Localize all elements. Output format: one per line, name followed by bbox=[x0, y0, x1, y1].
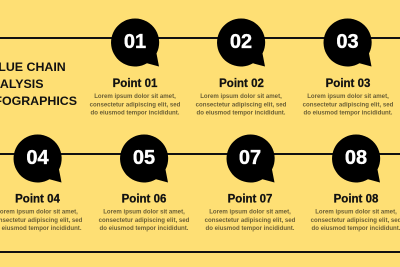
point 01 bbox=[90, 18, 181, 117]
heading 04: Point 04 bbox=[15, 194, 60, 206]
heading 07: Point 07 bbox=[228, 194, 272, 206]
number 07: 07 bbox=[239, 147, 261, 169]
point 03 bbox=[303, 18, 394, 116]
point 02 bbox=[196, 18, 287, 116]
text 02: Lorem ipsum dolor sit amet, bbox=[200, 93, 282, 100]
text 06: consectetur adipiscing elit, sed bbox=[99, 217, 190, 224]
icon: bubble 04 bbox=[14, 134, 62, 182]
text 08: do eiusmod tempor incididunt. bbox=[311, 225, 400, 232]
heading 03: Point 03 bbox=[326, 78, 370, 90]
icon: bubble 08 bbox=[332, 134, 380, 182]
text 01: Lorem ipsum dolor sit amet, bbox=[94, 93, 176, 100]
number 05: 05 bbox=[133, 147, 155, 169]
text 02 bbox=[196, 93, 287, 116]
point 07 bbox=[205, 134, 296, 232]
text 02: do eiusmod tempor incididunt. bbox=[196, 110, 286, 116]
text 08: consectetur adipiscing elit, sed bbox=[311, 217, 400, 224]
title bbox=[0, 60, 77, 108]
number 01: 01 bbox=[124, 31, 146, 53]
icon: bubble 03 bbox=[324, 18, 372, 66]
text 08: Lorem ipsum dolor sit amet, bbox=[315, 208, 397, 216]
number 03: 03 bbox=[336, 31, 359, 53]
number 08: 08 bbox=[345, 147, 367, 169]
heading 08: Point 08 bbox=[334, 194, 379, 206]
icon: bubble 01 bbox=[111, 18, 159, 67]
text 03: do eiusmod tempor incididunt. bbox=[303, 110, 393, 116]
text 08 bbox=[311, 208, 400, 232]
text 07: consectetur adipiscing elit, sed bbox=[205, 217, 296, 224]
heading 02: Point 02 bbox=[219, 78, 264, 90]
text 03 bbox=[303, 93, 394, 116]
number 02: 02 bbox=[230, 31, 252, 53]
text 07 bbox=[205, 208, 296, 232]
heading 06: Point 06 bbox=[122, 194, 166, 206]
text 06: Lorem ipsum dolor sit amet, bbox=[103, 208, 185, 216]
text 06 bbox=[99, 208, 190, 232]
text 07: do eiusmod tempor incididunt. bbox=[205, 225, 295, 232]
point 04 bbox=[0, 134, 83, 232]
text 01: do eiusmod tempor incididunt. bbox=[90, 110, 180, 116]
text 04 bbox=[0, 208, 83, 232]
heading 01: Point 01 bbox=[113, 78, 158, 90]
text 01 bbox=[90, 93, 181, 116]
text 03: consectetur adipiscing elit, sed bbox=[303, 102, 394, 108]
point 08 bbox=[311, 134, 400, 232]
text 07: Lorem ipsum dolor sit amet, bbox=[209, 208, 291, 216]
text 02: consectetur adipiscing elit, sed bbox=[196, 102, 287, 108]
icon: bubble 05 bbox=[120, 134, 168, 182]
text 06: do eiusmod tempor incididunt. bbox=[99, 225, 189, 232]
number 04: 04 bbox=[26, 147, 49, 169]
icon: bubble 07 bbox=[227, 134, 275, 182]
point 06 bbox=[99, 134, 190, 232]
text 01: consectetur adipiscing elit, sed bbox=[90, 102, 181, 108]
icon: bubble 02 bbox=[217, 18, 265, 66]
text 03: Lorem ipsum dolor sit amet, bbox=[307, 93, 389, 100]
